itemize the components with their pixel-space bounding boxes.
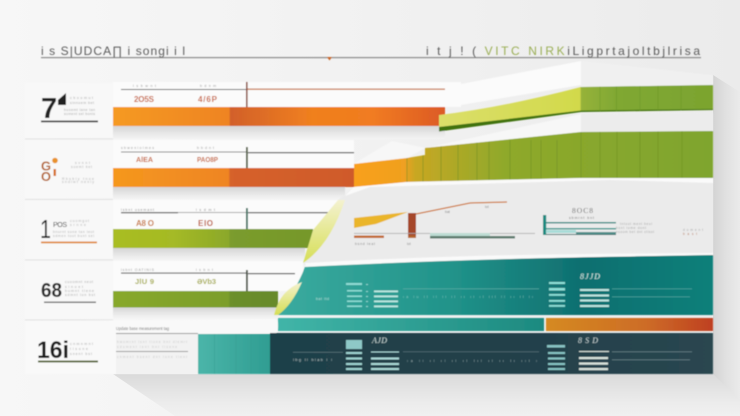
mini labels: lot	[407, 242, 411, 246]
band 1 dark lip	[439, 108, 713, 132]
row 5 text block	[116, 333, 198, 374]
teal block segments	[214, 334, 251, 374]
band 1 segments	[600, 87, 682, 112]
row 2 values: PAO8P	[197, 155, 218, 164]
row 3 labels	[121, 208, 215, 212]
row 4 green bar	[113, 291, 278, 308]
row 2 small text: Rbsbly tnoe	[62, 177, 94, 181]
row 2 small text: soemt bet	[71, 165, 92, 169]
row 2 labels: bbdnt	[197, 146, 214, 150]
dark right rules	[612, 352, 692, 360]
header marker	[327, 57, 332, 60]
right heading: i t j ! ( VITC NIRKiLigprtajoltbjlrisa	[426, 44, 700, 58]
row 3 shadow	[113, 248, 305, 260]
row 4 small text: bumnt tlene	[65, 289, 94, 293]
legend swatches	[354, 233, 515, 238]
row 5 heading: Update base measurement tag	[116, 326, 169, 332]
teal curl	[274, 282, 302, 315]
row 2 dot	[52, 158, 58, 163]
row 2 labels	[121, 146, 214, 150]
teal right value: 8JJD	[580, 272, 600, 281]
dark left bars	[346, 352, 362, 370]
row 1 values: 2O5S	[134, 95, 155, 104]
baseline	[354, 232, 535, 235]
row 3 small text: cuomgot	[70, 219, 89, 223]
panel: row 5	[25, 319, 278, 374]
row 1 orange bar	[113, 107, 445, 126]
white band shade	[581, 113, 713, 132]
bracket notes: bsnt lome dont	[616, 226, 646, 230]
row 3 number: 1	[40, 214, 51, 244]
dark left upper rule	[403, 350, 539, 353]
mini chart value: 8OC8	[572, 206, 593, 215]
row 3 small text	[53, 219, 94, 238]
row 1 small text: soment sel bonis	[64, 112, 95, 116]
bracket notes: doment	[683, 228, 703, 232]
row 4 labels: lsbnt	[196, 268, 213, 272]
mini labels: bat	[445, 210, 450, 214]
teal fill	[278, 255, 713, 315]
row 3 tick	[246, 208, 248, 230]
bottom shadow	[113, 374, 740, 416]
row 5 notes: cnment bsent dnt lone tlent	[117, 355, 187, 359]
row 4 card	[25, 261, 113, 319]
teal right bars	[549, 282, 565, 307]
teal block	[198, 334, 270, 374]
row 1 values	[134, 95, 218, 104]
row 5 notes: bwomrnt lsnt tlone bnt dlemrt	[117, 340, 187, 344]
row 2 small text: svnnt	[75, 161, 90, 165]
row 4 shadow	[113, 307, 278, 318]
row 4 small text	[65, 280, 95, 297]
row 1 line	[121, 88, 445, 90]
row 2 shadow	[113, 187, 345, 199]
row 1 icon	[58, 93, 66, 105]
row 3 values: EIO	[198, 219, 213, 228]
row 1 labels: bdnm	[200, 84, 216, 88]
row 4 labels	[121, 268, 213, 272]
row 2 second digit: O	[41, 169, 51, 184]
bracket notes	[616, 222, 703, 236]
row 4 labels: lsbnt OATINIS	[121, 268, 155, 272]
row 3 small text: sdmen toot bunt sel	[53, 234, 94, 238]
row 1 tick	[246, 82, 248, 107]
row 5 small text: snent bst	[70, 352, 92, 356]
teal right rules	[612, 288, 692, 297]
mini labels: bsnd leat	[355, 242, 375, 246]
panel: mini chart	[304, 178, 713, 265]
dark left dotted text: ıa ii ıl ıl ıl ıl lıl ıl ıı lı ııl ı	[407, 359, 537, 363]
dark right values	[579, 351, 609, 370]
row 4 values: JlU 9	[135, 277, 154, 286]
brown bar	[408, 213, 416, 237]
row 4 values: ƏVb3	[197, 277, 216, 286]
row 2 line	[121, 152, 354, 153]
row 1 small text: sinnoem bet	[70, 101, 94, 105]
row 5 underline	[38, 360, 98, 362]
header	[41, 44, 701, 60]
dark left rule	[293, 351, 343, 354]
dark left values	[371, 352, 399, 370]
trend line	[416, 202, 507, 214]
band 2 fill	[354, 131, 713, 187]
row 2 values	[136, 155, 218, 164]
panel: row 2	[25, 140, 354, 199]
row 4 small text: sinoet	[65, 285, 83, 289]
green band 2	[353, 130, 714, 188]
panel: dark summary	[270, 333, 713, 374]
row 3 values: A8 O	[136, 219, 154, 228]
teal left bars	[346, 283, 362, 307]
teal left caption: bat ltd	[316, 297, 329, 301]
bracket notes: tntoot ment beul	[620, 222, 652, 226]
yellow wedge	[354, 212, 408, 228]
dark fill	[270, 333, 713, 374]
row 1 underline	[41, 120, 98, 122]
teal left values	[374, 290, 398, 307]
row 5 card	[25, 319, 278, 374]
bracket bars	[546, 222, 616, 235]
row 1 shadow	[113, 126, 445, 139]
row 2 tick	[246, 147, 248, 168]
row 2 accent	[54, 169, 56, 176]
dark left value: AJD	[371, 336, 387, 345]
teal right values	[580, 289, 609, 307]
row 1 small text	[64, 96, 95, 116]
dark right value: 8SD	[578, 336, 598, 345]
panel: row 3	[25, 200, 338, 260]
row 2 number: G	[41, 158, 51, 174]
row 3 small text: bnurnt sone tan leot	[53, 230, 94, 234]
row 4 underline	[44, 302, 96, 303]
mini chart top highlight	[345, 178, 713, 196]
bracket notes: nsoom bet dnt ctlsst	[616, 230, 654, 234]
header rule	[41, 57, 701, 58]
row 2 orange bar	[113, 168, 354, 187]
row separators	[25, 138, 113, 320]
panel: row 1	[25, 82, 461, 139]
row 3 small text: srnne	[70, 223, 86, 227]
dark left caption: Ibg ll blab l i	[293, 358, 332, 362]
row 5 small text	[70, 342, 93, 356]
panel: teal summary	[274, 253, 713, 315]
row 4 chart area	[113, 261, 303, 291]
teal left dotted text: ıa iu il il ii il ıı ıi ıl iil ll ıı il iı	[403, 295, 533, 299]
white band	[354, 113, 713, 164]
row 1 card	[25, 83, 113, 138]
teal left rule	[403, 288, 539, 290]
row 2 values: AlEA	[136, 155, 154, 164]
dark right bars	[547, 345, 565, 370]
row 5 small text: tlsone	[70, 347, 88, 351]
row 2 small text: sndiwt nenly	[62, 180, 94, 184]
bracket stem	[543, 215, 546, 235]
green band 1	[439, 80, 713, 132]
row 3 underline	[41, 242, 97, 243]
row 5 small text: cnmnmnt	[70, 342, 93, 346]
row 4 small text: sdmnt lon bst	[65, 293, 95, 297]
band 2 segments	[406, 132, 618, 182]
row 1 labels	[133, 84, 216, 88]
row 5 notes	[117, 340, 187, 359]
left heading: i s S|UDCA∏ i songi i l	[41, 44, 185, 58]
mini chart background	[304, 180, 713, 265]
mini chart caption: sbmrnt bnt	[569, 216, 594, 220]
mini labels: lot	[485, 205, 489, 209]
band 1 fill	[439, 85, 713, 127]
row 3 labels: lsbnt osemant	[121, 208, 154, 212]
row 2 small text	[62, 161, 94, 184]
dark left block	[346, 340, 362, 349]
upper white wedge	[461, 61, 581, 105]
right side shadow	[713, 75, 740, 400]
panel: row 4	[25, 261, 303, 319]
row 2 chart area	[113, 140, 354, 168]
row 4 number: 68	[41, 280, 62, 302]
row 1 chart area	[113, 82, 461, 107]
teal left dots	[366, 284, 368, 307]
row 5 number: 16i	[37, 337, 69, 364]
row 5 rules	[116, 333, 198, 352]
row 1 number: 7	[41, 93, 57, 125]
teal strip	[278, 318, 544, 331]
upper light band	[581, 61, 713, 87]
row 3 green bar	[113, 229, 313, 248]
row 3 code: POS	[53, 222, 67, 229]
row 5 notes: sdoment lent bnt tlsene	[117, 345, 177, 349]
orange strip	[546, 318, 713, 331]
row 2 card	[25, 140, 113, 198]
row 1 values: 4/6P	[198, 95, 218, 104]
row 1 small text: cboomut	[70, 96, 93, 100]
row 2 labels: sbweniolmes	[121, 146, 154, 150]
row 3 labels: lsdmt	[196, 208, 215, 212]
row 4 line	[121, 272, 295, 274]
row 1 labels: lsbwnt	[133, 84, 156, 88]
row 4 tick	[246, 270, 248, 291]
curl: row 3	[303, 200, 345, 263]
row 4 small text: cuoomnt neot	[65, 280, 93, 284]
row 3 values	[136, 219, 213, 228]
row 4 values	[135, 277, 216, 286]
row 3 card	[25, 200, 113, 259]
row 3 chart area	[113, 200, 338, 230]
row 1 small text: buoemt lane tan	[64, 108, 95, 112]
row 3 line	[121, 212, 328, 213]
bracket notes: bast	[683, 232, 697, 236]
teal top edge	[305, 253, 713, 267]
teal bracket chart	[543, 215, 616, 235]
mini labels	[355, 205, 489, 246]
